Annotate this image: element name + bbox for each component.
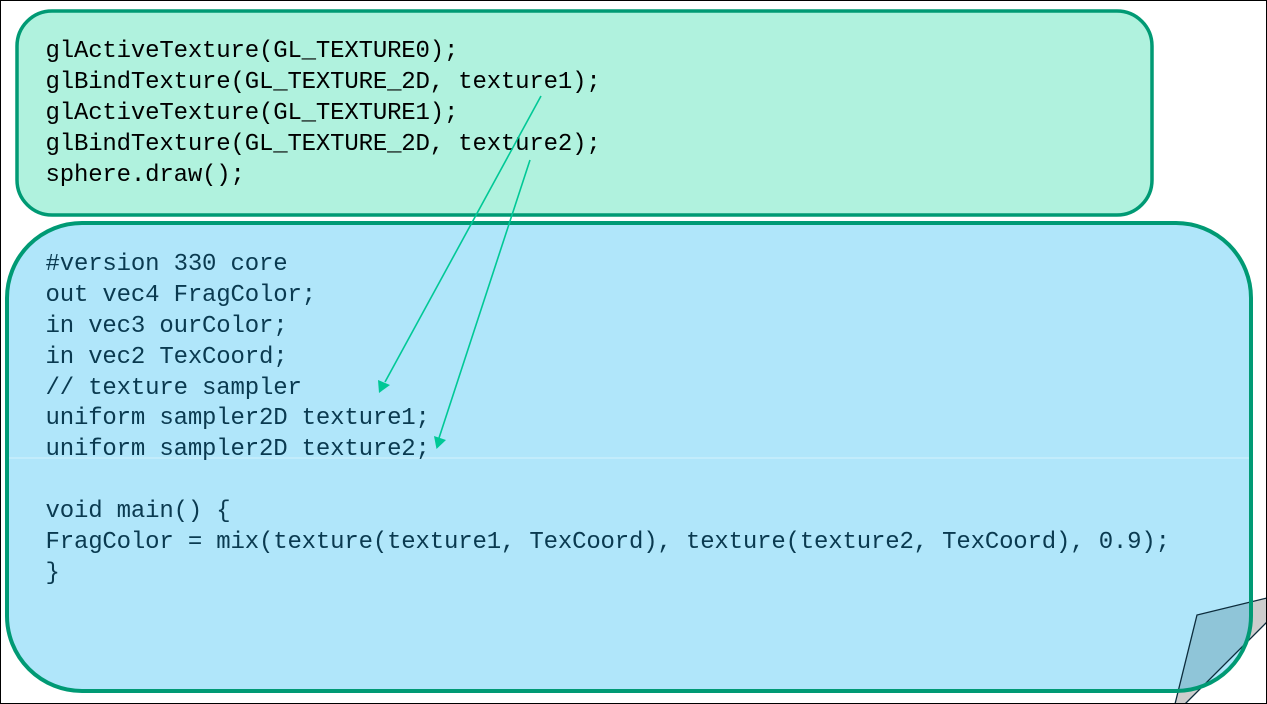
text block: fragment shader code: out vec4 FragColor; [46, 282, 316, 309]
text block: fragment shader code: FragColor = mix(texture(texture1, TexCoord), texture(texture2, TexCoord), 0.9); [46, 529, 1170, 556]
text block: texture binding code: glActiveTexture(GL_TEXTURE0); [46, 38, 458, 65]
text block: fragment shader code: in vec2 TexCoord; [46, 344, 287, 371]
panel: fragment shader background [7, 223, 1251, 691]
arrow: texture2 binding to sampler [434, 160, 530, 449]
arrow: texture1 binding to sampler [378, 96, 541, 393]
text block: fragment shader code: uniform sampler2D texture1; [46, 405, 430, 432]
text block: fragment shader code: // texture sampler [46, 375, 302, 402]
text block: texture binding code [46, 38, 601, 189]
text block: texture binding code: glBindTexture(GL_TEXTURE_2D, texture2); [46, 131, 601, 158]
text block: fragment shader code: in vec3 ourColor; [46, 313, 287, 340]
text block: texture binding code: sphere.draw(); [46, 162, 245, 189]
text block: texture binding code: glBindTexture(GL_TEXTURE_2D, texture1); [46, 69, 601, 96]
text block: fragment shader code: void main() { [46, 498, 231, 525]
icon: page curl [1175, 598, 1267, 704]
panel: OpenGL texture binding code [17, 11, 1152, 215]
text block: texture binding code: glActiveTexture(GL_TEXTURE1); [46, 100, 458, 127]
text block: fragment shader code: #version 330 core [46, 251, 287, 278]
text block: fragment shader code: uniform sampler2D texture2; [46, 436, 430, 463]
panel: fragment shader border [7, 223, 1251, 691]
text block: fragment shader code [46, 251, 1170, 587]
text block: fragment shader code: } [46, 560, 60, 587]
